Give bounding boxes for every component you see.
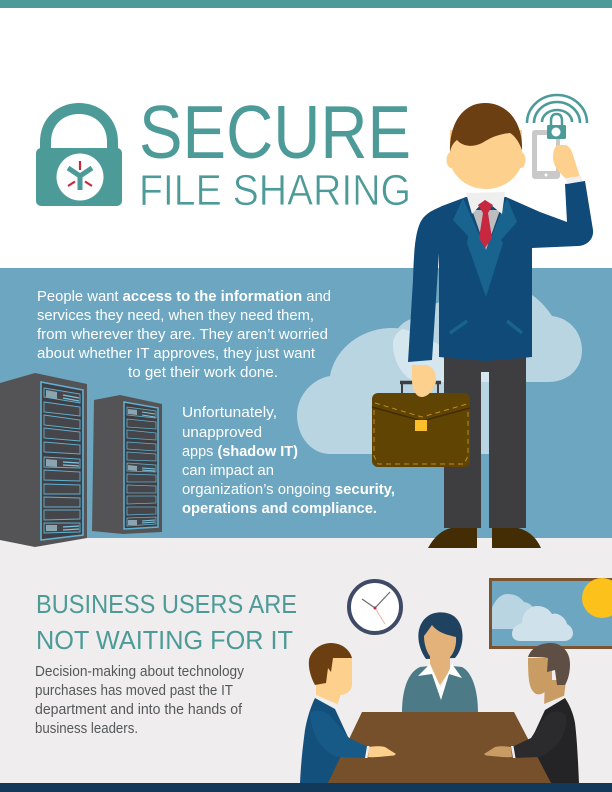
tie [478,200,493,248]
shirt collar [314,695,337,714]
cuff [566,176,583,184]
grey panel [0,538,612,783]
text block: shadow IT paragraph: can impact an [182,463,274,479]
light overlap of clouds [393,329,490,382]
face [528,658,552,694]
text block: decision making [35,664,245,737]
text block: decision making: purchases has moved past the IT [35,683,233,699]
briefcase handle [402,383,438,393]
suit body [520,698,579,783]
icon: server rack right [92,395,162,534]
cuff [511,746,516,758]
icon: wifi arcs [527,95,587,123]
hair [528,643,570,685]
text block: decision making: department and into the hands of [35,702,243,718]
blouse [402,666,478,712]
title: FILE SHARING [139,166,411,215]
briefcase [372,393,470,467]
jacket pockets [450,321,522,333]
icon: server rack left [0,373,87,547]
back cloud [393,290,582,382]
text block: shadow IT paragraph: organization’s ongoing security, [182,482,395,498]
icon: padlock logo [36,103,122,206]
text block: shadow IT paragraph: apps (shadow IT) [182,444,298,460]
hand [368,746,396,757]
hair [309,643,352,685]
shirt collar [544,695,568,714]
text block: intro paragraph [37,289,331,381]
table [328,712,551,783]
heading: business users [36,589,297,655]
ears [446,152,456,168]
top teal band [0,0,612,8]
neck [316,680,340,708]
title: SECURE [139,90,411,174]
text block: intro paragraph: People want access to the information and [37,289,331,305]
shirt [472,210,500,250]
hair [450,103,522,152]
text block: decision making: Decision-making about technology [35,664,245,680]
sleeve [310,711,368,758]
blue panel [0,268,612,538]
hand holding phone [553,145,580,179]
phone [532,130,560,179]
text block: intro paragraph: to get their work done. [128,365,278,381]
neck [430,650,450,685]
title [139,90,411,215]
shoes [428,528,541,548]
hand [484,746,512,757]
illustration: man left body [300,643,362,783]
jacket lapels [453,198,517,297]
illustration: man left arm and hand [310,711,396,758]
icon: wall clock [349,581,401,633]
front hand over briefcase handle [412,365,436,397]
icon: small padlock [547,114,566,139]
illustration: woman at table [402,612,478,712]
heading: business users: BUSINESS USERS ARE [36,589,297,619]
text block: intro paragraph: from wherever they are. They aren’t worried [37,327,328,343]
face [322,658,352,695]
collar [466,192,505,214]
illustration: man right body [520,643,579,783]
text block: shadow IT paragraph: operations and compliance. [182,501,377,517]
illustration: businessman with phone and briefcase [372,95,593,548]
bottom navy band [0,783,612,792]
sleeve [512,712,566,758]
text block: intro paragraph: about whether IT approves, they just want [37,346,315,362]
illustration: man right arm and hand [484,712,566,758]
collar [418,664,462,700]
text block: shadow IT paragraph: unapproved [182,425,262,441]
face [424,625,456,662]
text block: shadow IT paragraph: Unfortunately, [182,405,277,421]
painting: sky with sun and clouds [490,578,612,648]
heading: business users: NOT WAITING FOR IT [36,625,293,655]
cuff [365,746,370,758]
text block: decision making: business leaders. [35,721,138,737]
text block: shadow IT paragraph [182,405,395,517]
neck [544,680,566,708]
text block: intro paragraph: services they need, when they need them, [37,308,314,324]
hair [418,612,463,659]
front cloud [297,328,490,454]
legs [444,350,526,528]
face [450,130,522,189]
jacket [408,181,593,362]
suit body [300,698,362,783]
